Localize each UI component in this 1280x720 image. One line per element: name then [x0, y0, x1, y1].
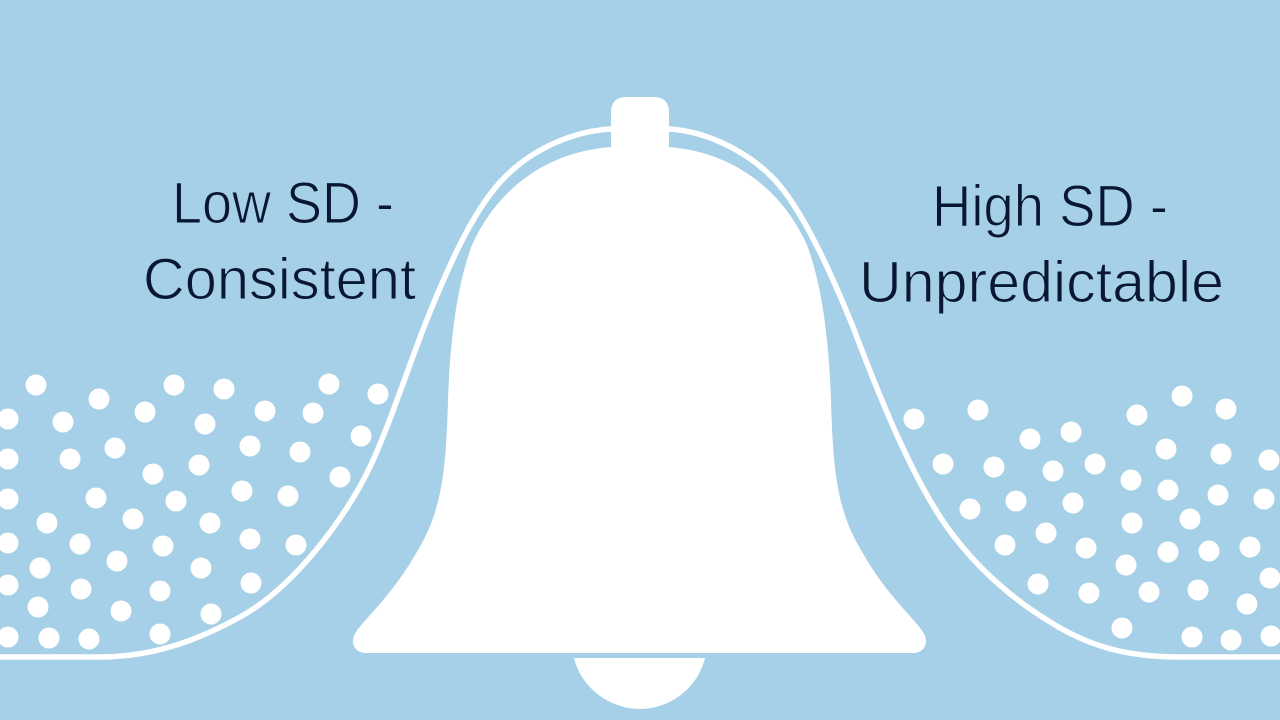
label: low SD	[143, 171, 416, 312]
bell clapper	[574, 658, 705, 709]
bell body	[353, 147, 926, 653]
label: high SD	[859, 174, 1224, 315]
bell curve line	[0, 129, 1280, 657]
text: Unpredictable: Unpredictable	[859, 250, 1224, 315]
text: Consistent: Consistent	[143, 247, 416, 312]
dots: left side	[0, 374, 388, 650]
text: Low SD: Low SD -	[172, 171, 394, 236]
icon: white bell	[353, 97, 926, 709]
bell handle	[611, 97, 669, 150]
dots: right side	[904, 386, 1280, 650]
text: High SD: High SD -	[932, 174, 1168, 239]
